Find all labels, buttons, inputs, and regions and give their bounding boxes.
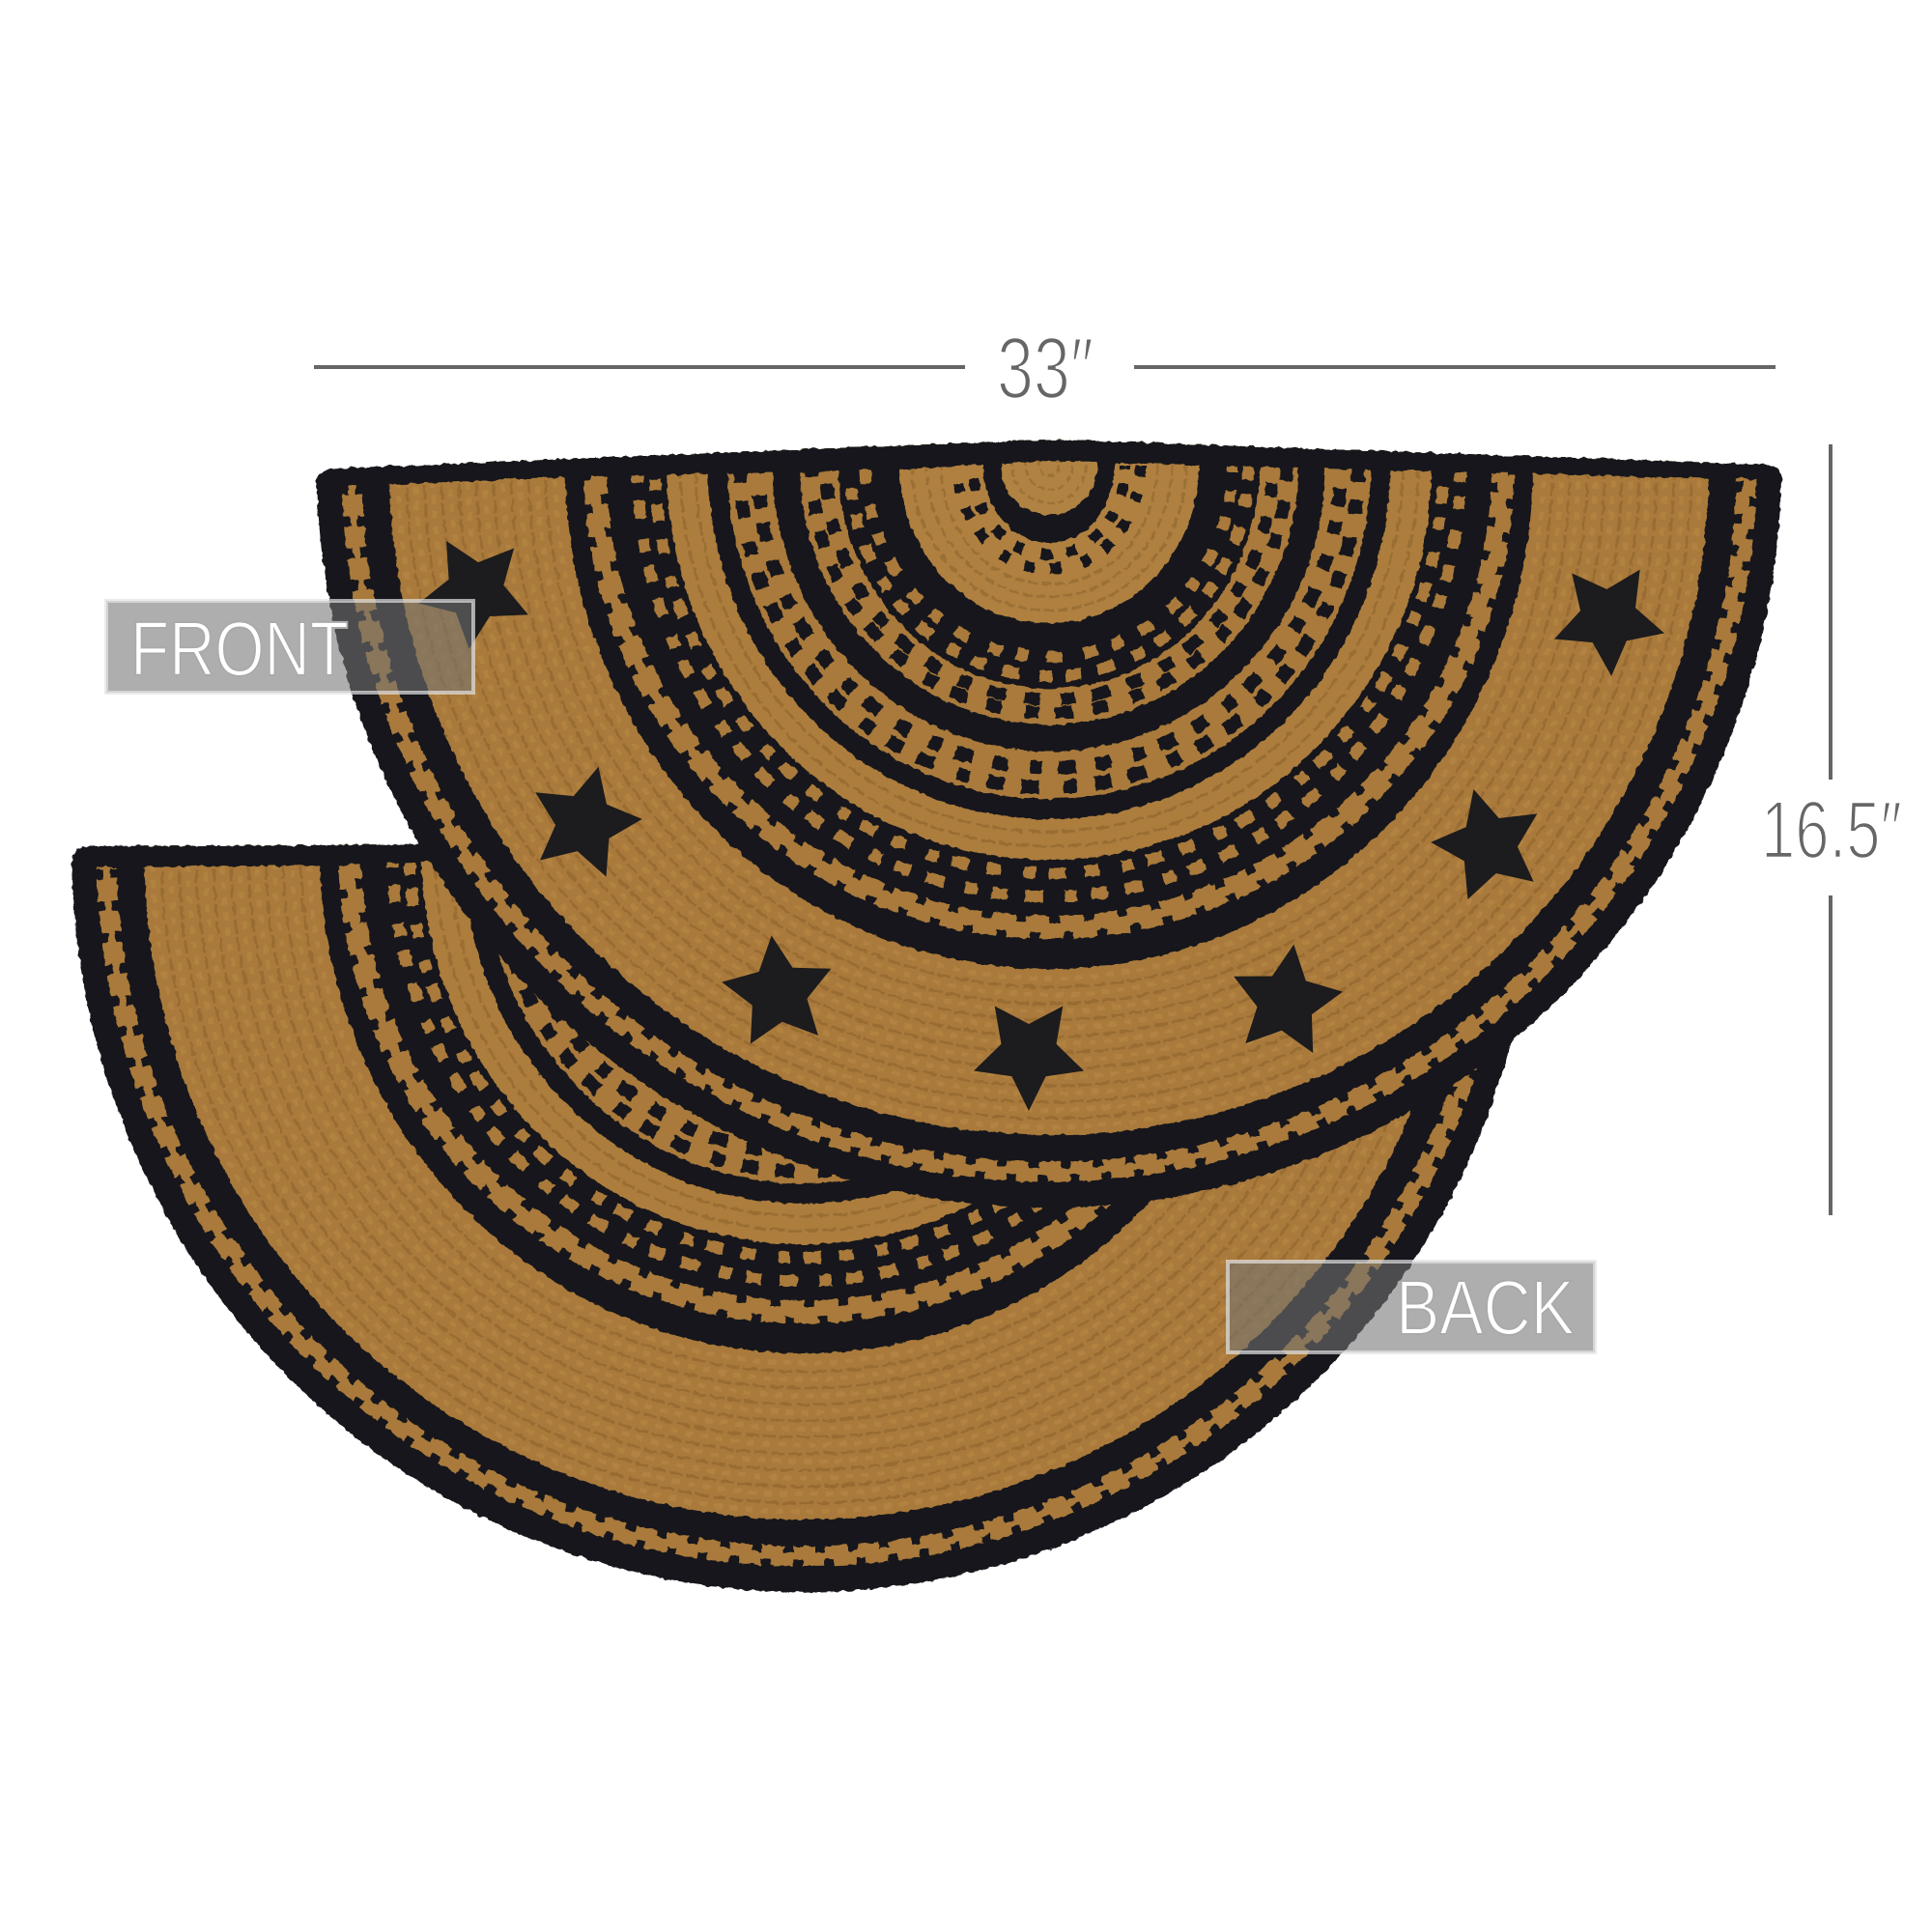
rug: front side with stars <box>315 439 1783 1208</box>
star 7 <box>1537 540 1686 688</box>
height dimension: 16.5 inches <box>1761 444 1902 1215</box>
star 1 <box>399 514 547 660</box>
rug: back side <box>71 843 1512 1594</box>
star 3 <box>717 929 838 1046</box>
star 4 <box>974 1007 1084 1111</box>
label: BACK <box>1228 1262 1595 1352</box>
star 2 <box>520 753 652 882</box>
label: FRONT <box>106 601 473 693</box>
width dimension: 33 inches: 33″ <box>997 321 1094 417</box>
label: FRONT: FRONT <box>130 606 349 692</box>
star 5 <box>1225 937 1349 1056</box>
star 6 <box>1420 775 1554 905</box>
label: BACK: BACK <box>1396 1264 1575 1350</box>
width dimension: 33 inches <box>314 321 1776 417</box>
